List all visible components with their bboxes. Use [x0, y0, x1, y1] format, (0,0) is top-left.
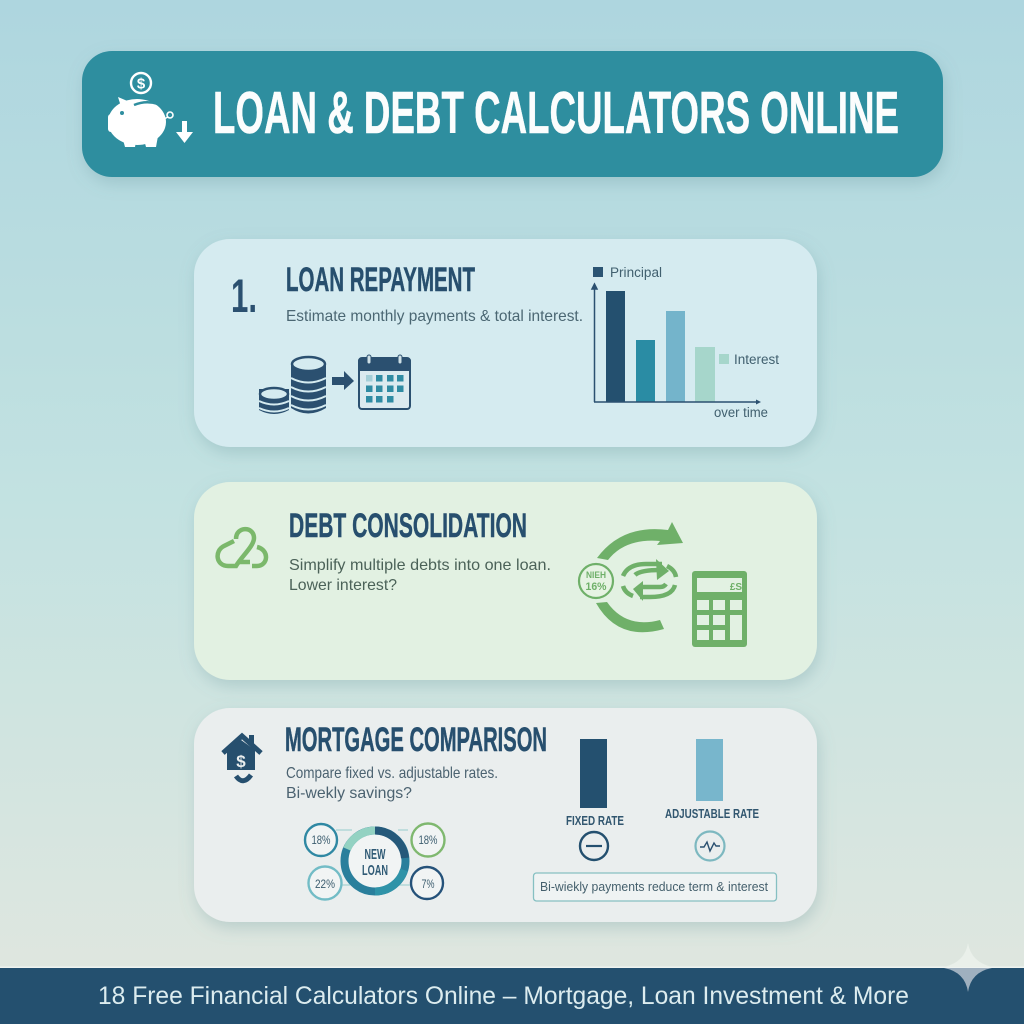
icon: calculator: £S: [730, 582, 742, 593]
donut chart: new loan: [305, 824, 444, 900]
comparison: adjustable rate: [665, 739, 759, 860]
bar chart: principal and interest: Interest: [734, 352, 779, 367]
callout: bi-weekly payments: Bi-wiekly payments reduce term & interest: [540, 879, 768, 894]
icon: arrow to calendar: [332, 371, 354, 390]
number 1: 1.: [231, 269, 257, 322]
panel: mortgage comparison: [194, 708, 817, 922]
bar chart: principal and interest: [592, 265, 779, 420]
icon: house with dollar: [223, 735, 261, 781]
icon: calendar: [358, 355, 411, 409]
bar chart: principal and interest: over time: [714, 405, 768, 420]
comparison: fixed rate: [566, 739, 624, 860]
icon: piggy bank with coin: $: [137, 76, 146, 92]
donut chart: new loan: 7%: [422, 879, 434, 891]
text: mortgage description: Compare fixed vs. adjustable rates.: [286, 765, 498, 782]
panel: debt consolidation: [194, 482, 817, 680]
text: debt description: [289, 557, 551, 594]
comparison: fixed rate: FIXED RATE: [566, 814, 624, 828]
icon: coin stacks: [259, 357, 326, 414]
text: debt description: Simplify multiple debts into one loan.: [289, 557, 551, 574]
heading: loan repayment: LOAN REPAYMENT: [286, 261, 475, 299]
donut chart: new loan: NEW: [364, 846, 386, 863]
comparison: adjustable rate: ADJUSTABLE RATE: [665, 807, 759, 821]
icon: refinancing arrows: [579, 522, 683, 632]
icon: piggy bank with coin: [108, 73, 193, 147]
heading: mortgage comparison: MORTGAGE COMPARISON: [285, 721, 547, 759]
icon: refinancing arrows: NIEH: [586, 570, 606, 581]
icon: linked loops: [218, 529, 266, 566]
heading: debt consolidation: DEBT CONSOLIDATION: [289, 507, 527, 545]
donut chart: new loan: 18%: [312, 835, 330, 847]
donut chart: new loan: LOAN: [362, 862, 388, 879]
title banner: [82, 51, 943, 177]
donut chart: new loan: 18%: [418, 835, 438, 847]
text: loan description: Estimate monthly payments & total interest.: [286, 308, 583, 325]
donut chart: new loan: 22%: [315, 879, 335, 891]
footer text: 18 Free Financial Calculators Online – Mortgage, Loan Investment & More: [98, 982, 909, 1010]
bar chart: principal and interest: Principal: [610, 265, 662, 280]
icon: calculator: [692, 571, 747, 647]
footer bar: [0, 966, 1024, 1024]
icon: house with dollar: $: [236, 752, 246, 771]
text: debt description: Lower interest?: [289, 577, 397, 594]
text: mortgage description: [286, 765, 498, 802]
icon: refinancing arrows: 16%: [586, 581, 607, 593]
panel: loan repayment: [194, 239, 817, 447]
text: mortgage description: Bi-wekly savings?: [286, 785, 412, 802]
callout: bi-weekly payments: [534, 873, 776, 901]
icon: sparkle: [944, 943, 992, 992]
